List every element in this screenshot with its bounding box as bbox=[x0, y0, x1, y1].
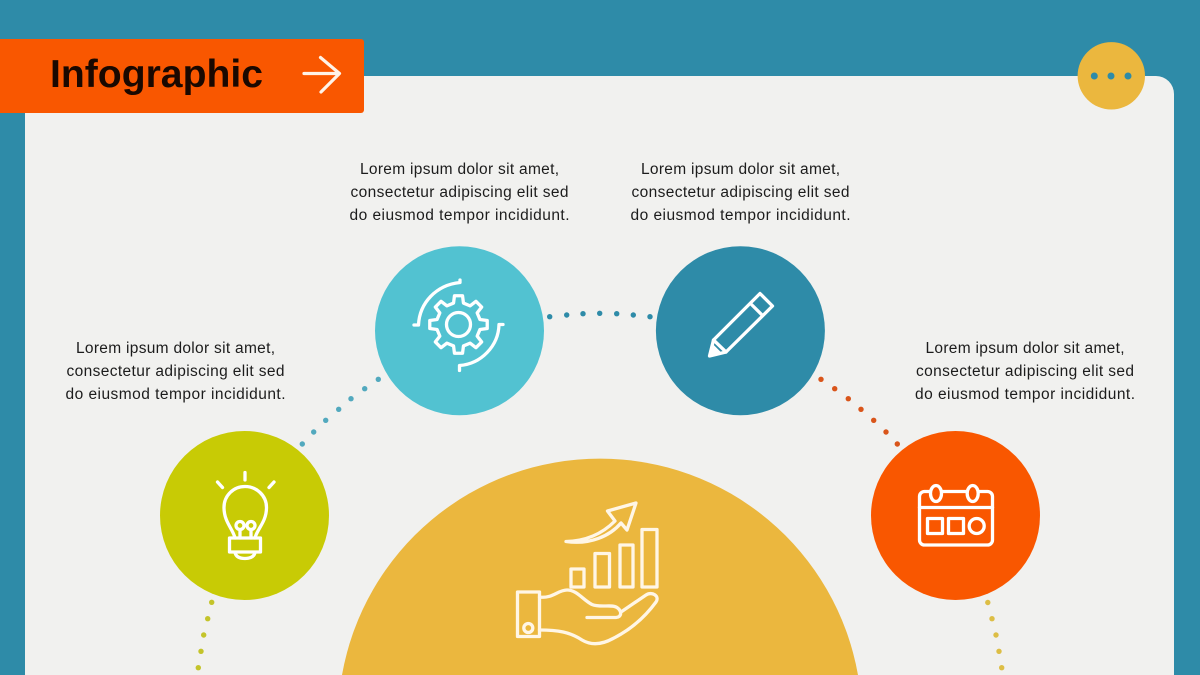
central semicircle bbox=[342, 459, 858, 675]
node: calendar bbox=[871, 431, 1040, 600]
dotted connector: teal to orange bbox=[818, 377, 900, 447]
text block: left bbox=[66, 340, 286, 403]
text block: upper left bbox=[350, 161, 570, 224]
icon: hand with growth chart bbox=[518, 503, 657, 644]
dotted connector: cyan to teal bbox=[547, 311, 653, 319]
text block: upper right: consectetur adipiscing elit sed bbox=[632, 184, 850, 201]
icon: calendar bbox=[920, 486, 992, 545]
icon: arrow bbox=[304, 58, 340, 92]
title: Infographic bbox=[50, 53, 263, 96]
icon: pencil bbox=[710, 294, 772, 356]
text block: upper left: Lorem ipsum dolor sit amet, bbox=[360, 161, 559, 178]
dotted connector: orange downward bbox=[985, 600, 1004, 670]
text block: upper right bbox=[630, 161, 850, 224]
text block: right bbox=[915, 340, 1135, 403]
title banner bbox=[0, 39, 364, 113]
node: gear bbox=[375, 246, 544, 415]
text block: right: consectetur adipiscing elit sed bbox=[916, 363, 1134, 380]
dotted connector: lime downward bbox=[196, 600, 214, 670]
dotted connector: lime to cyan bbox=[300, 377, 381, 447]
icon: gear with cycle arrows bbox=[414, 280, 503, 370]
text block: upper right: do eiusmod tempor incididunt. bbox=[630, 207, 850, 224]
text block: right: do eiusmod tempor incididunt. bbox=[915, 386, 1135, 403]
text block: left: Lorem ipsum dolor sit amet, bbox=[76, 340, 275, 357]
node: lightbulb bbox=[160, 431, 329, 600]
text block: upper left: consectetur adipiscing elit sed bbox=[350, 184, 568, 201]
node: pencil bbox=[656, 246, 825, 415]
text block: right: Lorem ipsum dolor sit amet, bbox=[926, 340, 1124, 357]
menu badge bbox=[1078, 42, 1145, 109]
text block: upper left: do eiusmod tempor incididunt. bbox=[350, 207, 570, 224]
text block: upper right: Lorem ipsum dolor sit amet, bbox=[641, 161, 840, 178]
icon: lightbulb bbox=[218, 472, 274, 558]
text block: left: consectetur adipiscing elit sed bbox=[66, 363, 284, 380]
text block: left: do eiusmod tempor incididunt. bbox=[66, 386, 286, 403]
